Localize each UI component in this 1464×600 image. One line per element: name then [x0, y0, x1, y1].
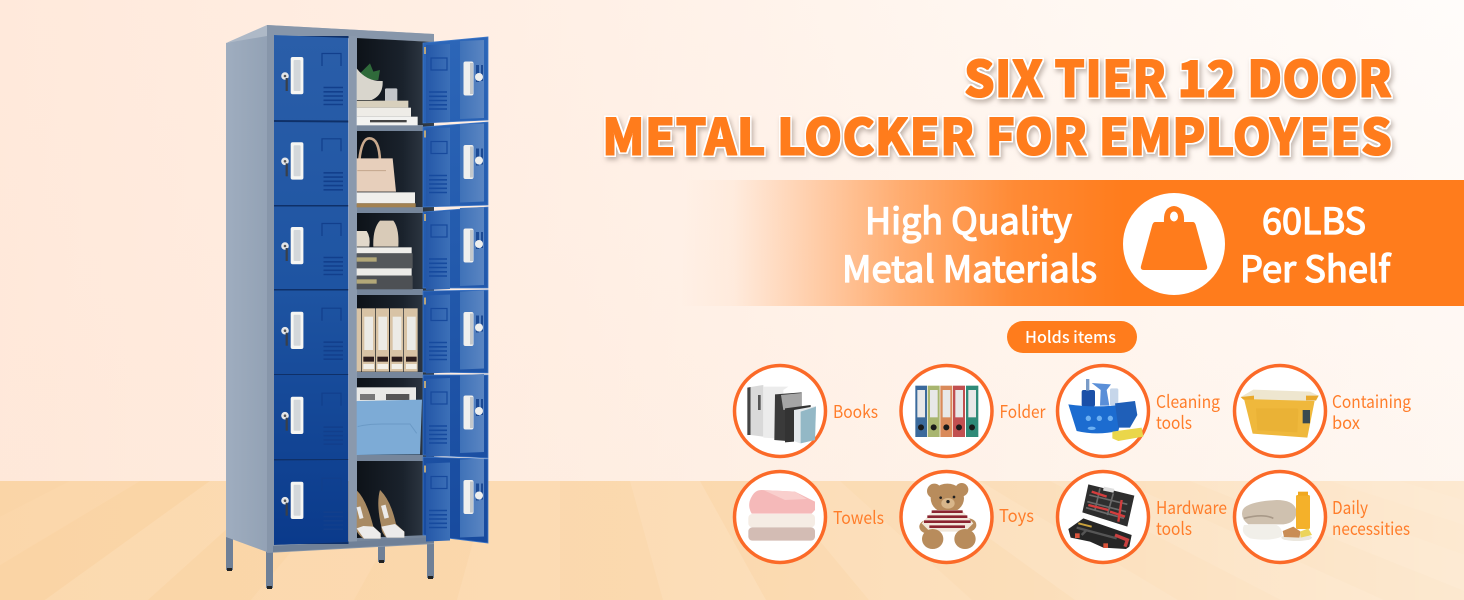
shelves [357, 125, 428, 546]
books shelf two [357, 192, 416, 207]
right door hardware [424, 40, 484, 542]
front frame [267, 25, 434, 553]
label: Folder [1000, 399, 1046, 424]
label [1156, 495, 1227, 541]
banner right text: Per Shelf [1240, 241, 1391, 293]
top face [226, 25, 434, 43]
item: books [734, 366, 878, 456]
label: Daily [1332, 495, 1368, 520]
item: cleaning tools [1058, 366, 1220, 456]
banner [680, 180, 1464, 306]
label: tools [1156, 410, 1192, 435]
banner right text: 60LBS [1262, 193, 1366, 245]
label: Containing [1332, 389, 1411, 414]
label: Hardware [1156, 495, 1227, 520]
title [602, 40, 1392, 170]
interior [356, 38, 434, 545]
wooden floor [0, 481, 1464, 600]
books shelf one [357, 101, 418, 125]
banner left text: High Quality [865, 193, 1072, 245]
shelf contents upper [357, 63, 418, 289]
legs [226, 535, 434, 589]
locker [226, 25, 488, 589]
label: box [1332, 410, 1360, 435]
banner left text: Metal Materials [842, 241, 1097, 293]
label: Towels [833, 505, 884, 530]
shelf contents lower [357, 308, 422, 539]
label: necessities [1332, 516, 1410, 541]
left doors [274, 35, 348, 545]
label: Toys [999, 503, 1034, 528]
vases [357, 221, 398, 247]
holds items pill: Holds items [1025, 324, 1116, 348]
item: folder [901, 366, 1046, 456]
side panel [226, 34, 267, 552]
handbag [357, 138, 396, 192]
left door hardware [281, 54, 343, 529]
papers [357, 387, 416, 401]
label: Cleaning [1156, 389, 1220, 414]
item: towels [734, 472, 884, 562]
title: METAL LOCKER FOR EMPLOYEES [602, 98, 1392, 170]
holds items pill [1007, 321, 1137, 353]
left door gaps [274, 36, 348, 544]
center post [349, 36, 357, 546]
blue bin [357, 400, 422, 455]
label: tools [1156, 516, 1192, 541]
right doors [423, 37, 488, 543]
item: toys [901, 472, 1034, 562]
shoes [357, 490, 404, 539]
small bottle [385, 88, 397, 102]
item: daily necessities [1234, 472, 1410, 562]
banner left text [842, 193, 1097, 293]
plant and bowl [357, 63, 383, 100]
banner right text [1240, 193, 1391, 293]
bottom rail [273, 537, 434, 552]
label [1332, 389, 1411, 435]
item: containing box [1234, 366, 1411, 456]
binders [357, 308, 418, 372]
icon: weight [1123, 193, 1225, 295]
title: SIX TIER 12 DOOR [964, 40, 1392, 112]
label [1156, 389, 1220, 435]
label: Books [833, 399, 878, 424]
item: hardware tools [1058, 472, 1227, 562]
book stack [357, 247, 413, 289]
label [1332, 495, 1410, 541]
